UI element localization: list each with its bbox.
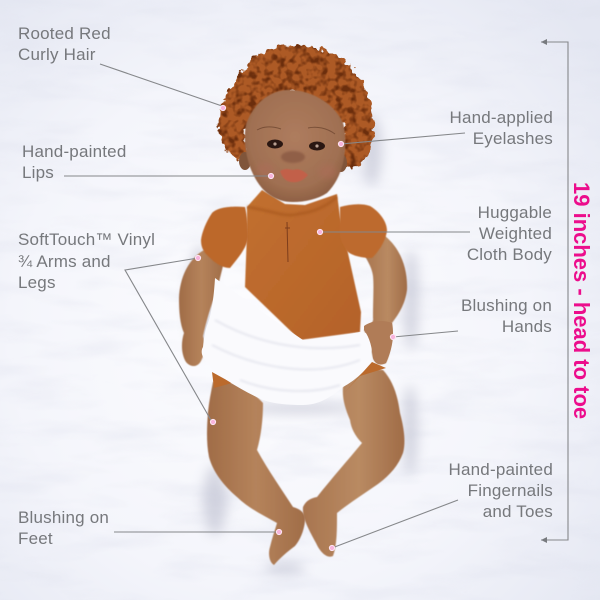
height bracket with arrows [541, 39, 568, 543]
callout: hand-applied eyelashes [338, 108, 553, 148]
doll right leg [303, 370, 404, 557]
callout: hand-painted lips: Lips [22, 163, 54, 182]
callout: hand-painted fingernails and toes [329, 460, 553, 551]
callout: blushing on hands [390, 296, 552, 340]
doll right arm [364, 236, 407, 364]
nose [281, 151, 305, 163]
callout: hand-painted lips: Hand-painted [22, 142, 126, 161]
vertical height label: 19 inches - head to toe [569, 182, 594, 419]
head [239, 90, 347, 202]
callout: SoftTouch vinyl arms and legs: SoftTouch™ Vinyl [18, 230, 155, 249]
callout: hand-painted fingernails and toes: Fingernails [468, 481, 553, 500]
callout: SoftTouch vinyl arms and legs: ¾ Arms and [18, 252, 111, 271]
hair [219, 46, 373, 170]
callout: blushing on hands: Hands [502, 317, 552, 336]
doll left sleeve [201, 207, 248, 268]
cheeks [256, 163, 337, 179]
callout: hand-applied eyelashes: Hand-applied [449, 108, 553, 127]
right hand over blanket [364, 321, 393, 364]
callout: SoftTouch vinyl arms and legs: Legs [18, 273, 56, 292]
callout: huggable weighted cloth body: Weighted [479, 224, 552, 243]
left eye [267, 140, 283, 148]
right eye [309, 142, 325, 150]
callout: hand-painted lips [22, 142, 274, 182]
callout: blushing on feet: Blushing on [18, 508, 109, 527]
callout: hand-painted fingernails and toes: Hand-painted [449, 460, 553, 479]
white blanket wrap [202, 278, 373, 405]
callout: rooted red curly hair [18, 24, 226, 111]
callout: blushing on hands: Blushing on [461, 296, 552, 315]
callout: blushing on feet: Feet [18, 529, 53, 548]
lips [280, 169, 308, 182]
callout: SoftTouch vinyl arms and legs [18, 230, 216, 425]
callout: huggable weighted cloth body [317, 203, 552, 264]
callout: rooted red curly hair: Rooted Red [18, 24, 111, 43]
orange shorts [212, 362, 386, 392]
shadow around doll [188, 115, 419, 574]
brows [257, 127, 335, 134]
callout: blushing on feet [18, 508, 282, 548]
callout: rooted red curly hair: Curly Hair [18, 45, 96, 64]
callout: hand-applied eyelashes: Eyelashes [473, 129, 553, 148]
callout: hand-painted fingernails and toes: and Toes [483, 502, 553, 521]
callout: huggable weighted cloth body: Huggable [478, 203, 552, 222]
doll left leg [207, 381, 305, 565]
doll [179, 46, 407, 565]
doll torso [245, 190, 361, 340]
callout: huggable weighted cloth body: Cloth Body [467, 245, 552, 264]
doll right sleeve [340, 204, 387, 258]
doll left arm [179, 250, 224, 366]
